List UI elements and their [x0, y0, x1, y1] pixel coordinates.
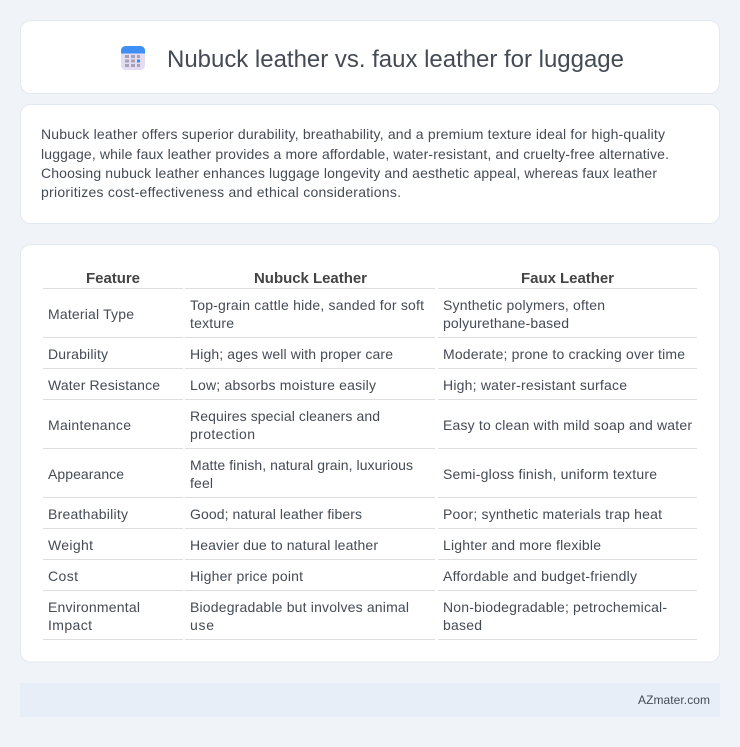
row: environmental impact: Biodegradable but involves animal [190, 599, 409, 615]
summary text: Nubuck leather offers superior durability, breathability, and a premium texture ideal for high-quality [41, 126, 665, 142]
table header: Feature [86, 270, 140, 287]
row: environmental impact: Non-biodegradable; petrochemical- [443, 599, 667, 615]
row: maintenance: protection [190, 426, 255, 442]
row: appearance: feel [190, 475, 213, 491]
title: Nubuck leather vs. faux leather for luggage [167, 46, 624, 73]
panel: comparison table [20, 244, 720, 662]
row: maintenance: Easy to clean with mild soap and water [443, 417, 692, 433]
row: breathability [48, 506, 662, 522]
row: cost: Affordable and budget-friendly [443, 568, 637, 584]
row: material type: Synthetic polymers, often [443, 297, 605, 313]
row: durability: Durability [48, 346, 108, 362]
panel: title header [20, 20, 720, 94]
row: environmental impact: based [443, 617, 482, 633]
row: material type: Material Type [48, 306, 134, 322]
row: environmental impact: Impact [48, 617, 92, 633]
row: water resistance [48, 377, 627, 393]
row: appearance: Appearance [48, 466, 124, 482]
row: water resistance: Low; absorbs moisture easily [190, 377, 376, 393]
table header: Faux Leather [521, 270, 614, 287]
row: material type [48, 297, 605, 331]
row: durability: High; ages well with proper care [190, 346, 393, 362]
row: weight: Heavier due to natural leather [190, 537, 378, 553]
summary text [41, 126, 669, 200]
row: environmental impact [48, 599, 667, 633]
panel: summary [20, 104, 720, 224]
row: water resistance: Water Resistance [48, 377, 160, 393]
row: durability: Moderate; prone to cracking over time [443, 346, 685, 362]
row: appearance: Matte finish, natural grain, luxurious [190, 457, 413, 473]
row: appearance [48, 457, 657, 491]
row: cost: Higher price point [190, 568, 303, 584]
row: maintenance [48, 408, 692, 442]
row: environmental impact: Environmental [48, 599, 140, 615]
row: weight: Lighter and more flexible [443, 537, 601, 553]
row: cost: Cost [48, 568, 78, 584]
row: cost [48, 568, 637, 584]
row: breathability: Good; natural leather fibers [190, 506, 362, 522]
table header: Nubuck Leather [254, 270, 367, 287]
row: water resistance: High; water-resistant surface [443, 377, 627, 393]
row: material type: polyurethane-based [443, 315, 569, 331]
row: environmental impact: use [190, 617, 214, 633]
row: breathability: Breathability [48, 506, 128, 522]
summary text: prioritizes cost-effectiveness and ethical considerations. [41, 184, 401, 200]
row: durability [48, 346, 685, 362]
row: maintenance: Maintenance [48, 417, 131, 433]
row: weight [48, 537, 601, 553]
row: weight: Weight [48, 537, 93, 553]
row: material type: Top-grain cattle hide, sanded for soft [190, 297, 424, 313]
row: maintenance: Requires special cleaners and [190, 408, 380, 424]
summary text: Choosing nubuck leather enhances luggage longevity and aesthetic appeal, whereas faux leather [41, 165, 657, 181]
footer credit: AZmater.com [638, 693, 710, 707]
icon: calendar [121, 46, 145, 70]
row: appearance: Semi-gloss finish, uniform texture [443, 466, 657, 482]
table header [86, 270, 614, 287]
row: material type: texture [190, 315, 234, 331]
summary text: luggage, while faux leather provides a more affordable, water-resistant, and cruelty-free alternative. [41, 146, 669, 162]
footer [20, 683, 720, 717]
row: breathability: Poor; synthetic materials trap heat [443, 506, 662, 522]
